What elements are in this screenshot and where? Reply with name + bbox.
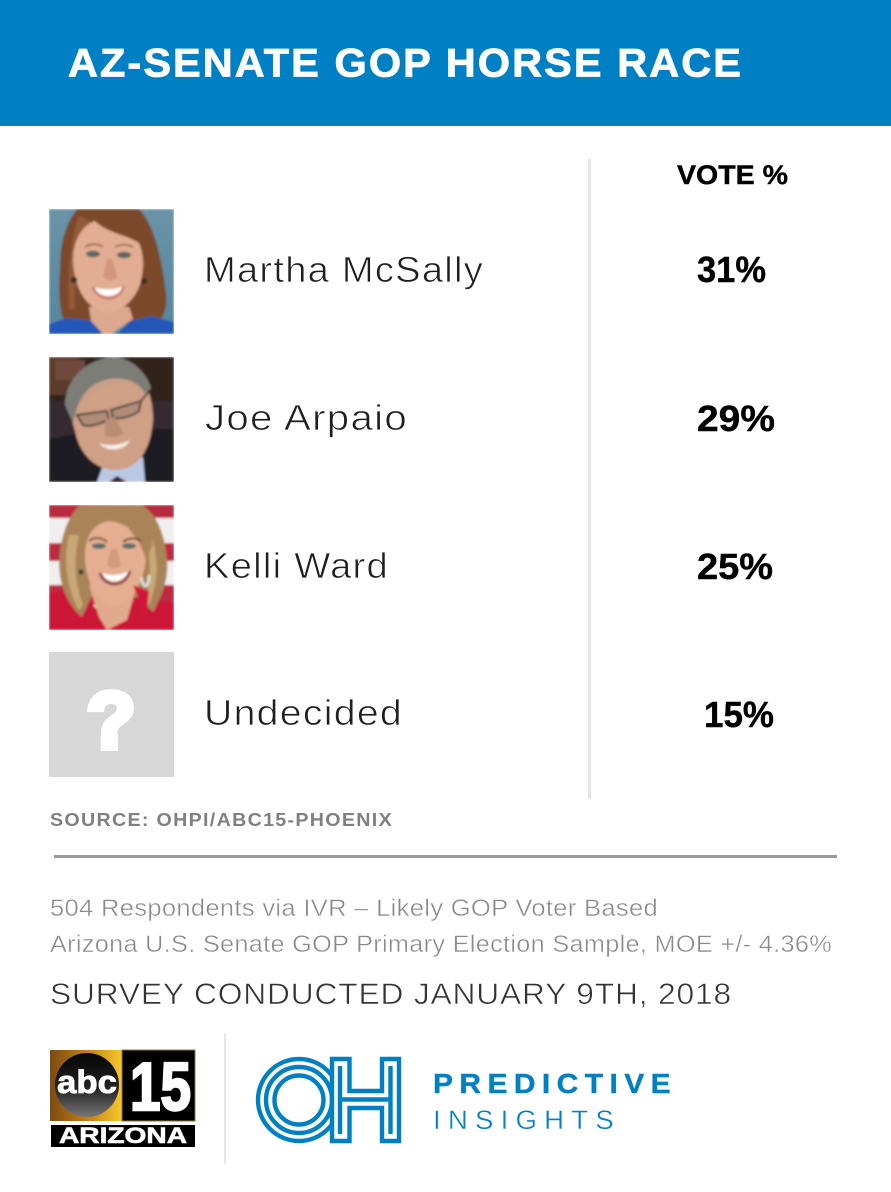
logo divider [224,1033,226,1164]
candidate name: Undecided [204,692,403,733]
wordmark: insights: INSIGHTS [433,1105,621,1135]
candidate name: Martha McSally [204,249,484,290]
survey date: SURVEY CONDUCTED JANUARY 9TH, 2018 [50,978,732,1011]
header banner [0,0,891,126]
logo: abc15 Arizona: abc [57,1064,117,1100]
logo: abc15 Arizona: ARIZONA [59,1123,187,1148]
logo: OH Predictive Insights [258,1059,677,1141]
row: Kelli Ward [49,505,773,630]
logo: abc15 Arizona: 15 [130,1049,191,1125]
column divider [588,159,591,799]
placeholder portrait with question mark: ? [87,676,135,765]
portrait: Kelli Ward [49,505,174,630]
horizontal rule [54,855,837,858]
candidate name: Joe Arpaio [205,397,408,438]
OH monogram [258,1059,399,1141]
vote share: 25% [697,546,773,587]
methodology text [50,895,832,958]
portrait: Martha McSally [49,209,174,334]
row: Martha McSally [49,209,766,334]
methodology text: 504 Respondents via IVR – Likely GOP Voter Based [50,895,658,922]
placeholder portrait with question mark [49,652,174,777]
row: Joe Arpaio [49,357,775,482]
portrait: Joe Arpaio [49,357,174,482]
methodology text: Arizona U.S. Senate GOP Primary Election Sample, MOE +/- 4.36% [50,931,832,958]
logo: abc15 Arizona [50,1049,195,1148]
vote share: 31% [697,249,766,290]
vote share: 29% [697,398,775,439]
wordmark: predictive: PREDICTIVE [433,1068,677,1099]
source line: SOURCE: OHPI/ABC15-PHOENIX [50,810,393,830]
candidate name: Kelli Ward [204,545,389,586]
column heading: vote percent: VOTE % [677,160,788,190]
vote share: 15% [704,694,774,735]
title: AZ-SENATE GOP HORSE RACE [68,42,743,86]
row: Undecided [49,652,774,777]
